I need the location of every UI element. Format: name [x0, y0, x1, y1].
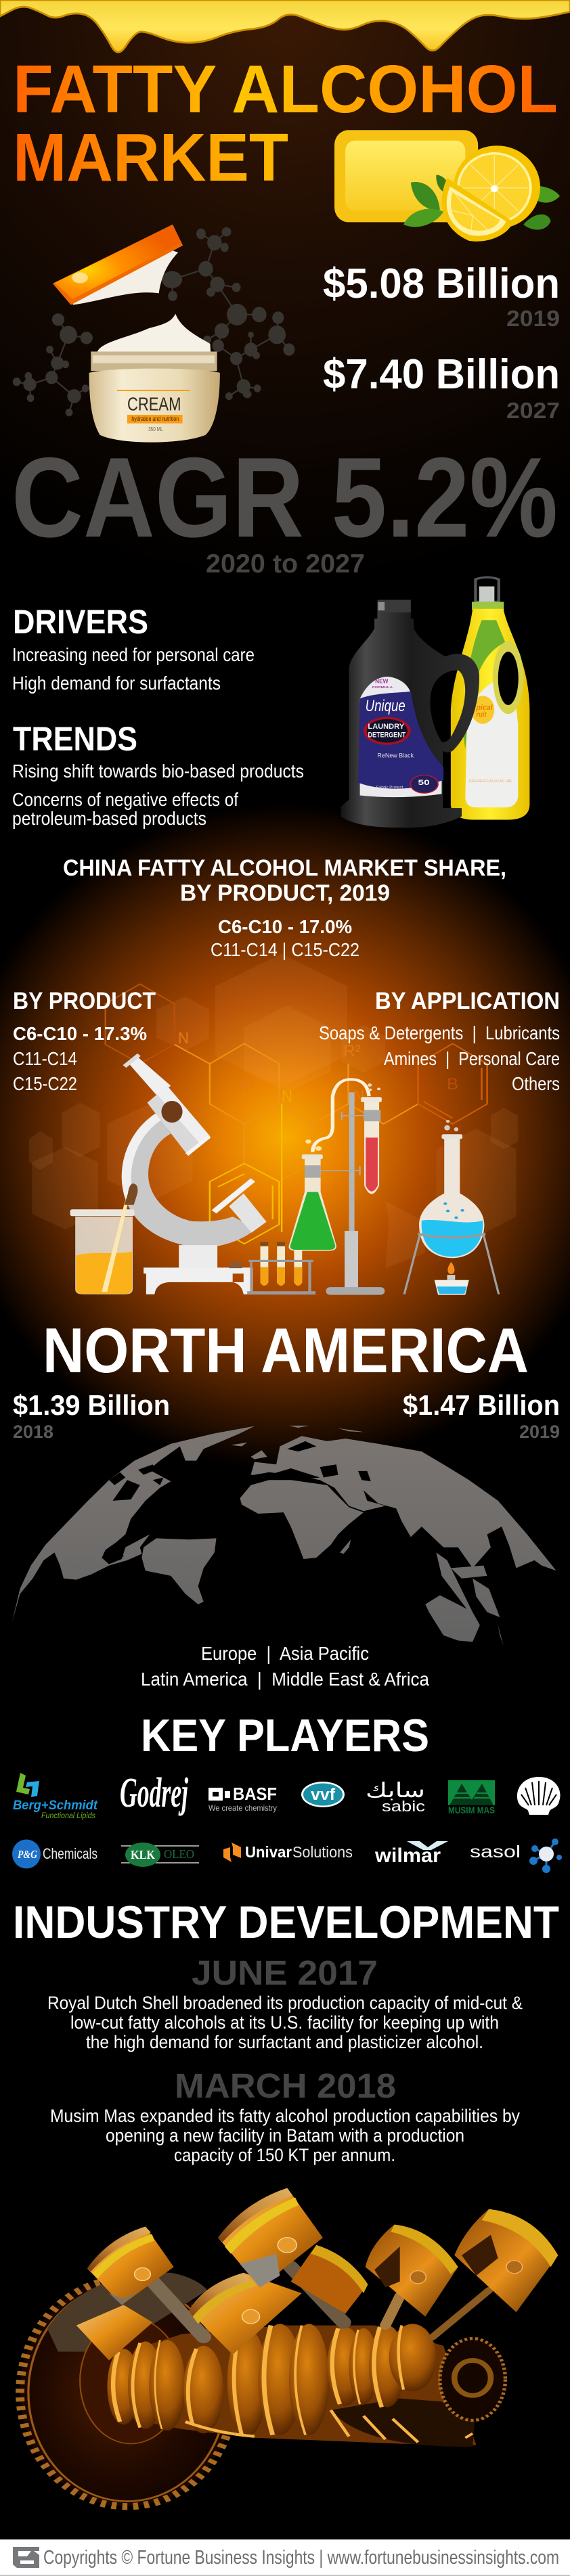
- icon: detergent bottles: ReNew Black: [377, 752, 414, 759]
- logo: Berg+Schmidt: Berg+Schmidt: [13, 1799, 98, 1813]
- icon: detergent bottles: Fabric Protect: [376, 786, 403, 790]
- chemistry labels: N: [178, 1029, 189, 1047]
- market value 2027: [323, 351, 560, 423]
- chemistry labels: R¹: [239, 1077, 254, 1095]
- market value 2019: [323, 261, 560, 331]
- chemistry labels: R²: [343, 1042, 361, 1060]
- logo: Univar Solutions: Univar: [245, 1843, 292, 1861]
- other regions: Europe | Asia Pacific: [201, 1643, 369, 1664]
- icon: detergent bottles: LAUNDRY: [368, 723, 405, 731]
- by product list: BY PRODUCT: [13, 988, 156, 1014]
- North America 2018 value: 2018: [13, 1422, 53, 1442]
- top brown background glow: [0, 0, 570, 595]
- development: June 2017: low-cut fatty alcohols at its U.S. facility for keeping up with: [70, 2012, 499, 2033]
- footer logo: [13, 2547, 39, 2568]
- by product list: [13, 988, 156, 1094]
- logo: P&G Chemicals: P&G: [17, 1848, 38, 1861]
- icon: world map globe: [12, 1426, 556, 1646]
- trends: Concerns of negative effects of: [12, 789, 238, 810]
- icon: cream jar: CREAM: [127, 394, 181, 415]
- logo: Sasol: [470, 1838, 562, 1873]
- by product list: C6-C10 - 17.3%: [13, 1023, 147, 1044]
- footer bar: [0, 2539, 570, 2576]
- logo: BASF: [209, 1784, 277, 1813]
- trends: [12, 720, 304, 829]
- icon: detergent bottles: 50: [418, 779, 430, 787]
- pistons: [76, 2188, 558, 2360]
- chart heading: China share: C6-C10 - 17.0%: [218, 916, 352, 937]
- logo: Musim Mas: [448, 1780, 495, 1815]
- by product list: C15-C22: [13, 1073, 77, 1094]
- drivers: [12, 603, 255, 694]
- development: June 2017: JUNE 2017: [192, 1953, 378, 1992]
- title: MARKET: [13, 120, 288, 196]
- development: March 2018: MARCH 2018: [175, 2066, 396, 2105]
- title: [13, 51, 558, 196]
- chemistry labels: N: [353, 1087, 364, 1106]
- icon: cream jar: [53, 225, 220, 443]
- other regions: [141, 1643, 429, 1690]
- small gear: [440, 2338, 505, 2420]
- icon: cream jar: hydration and nutrition: [131, 415, 179, 422]
- logo: P&G Chemicals: Chemicals: [43, 1845, 97, 1862]
- development: March 2018: Musim Mas expanded its fatty alcohol production capabilities by: [50, 2106, 520, 2126]
- logo: Musim Mas: MUSIM MAS: [448, 1805, 495, 1815]
- title: FATTY ALCOHOL: [13, 51, 558, 127]
- icon: soap and lemon: [334, 130, 560, 242]
- development: June 2017: Royal Dutch Shell broadened its production capacity of mid-cut &: [47, 1993, 523, 2013]
- icon: detergent bottles: FORMULA: [372, 686, 393, 690]
- chemistry labels: B: [447, 1075, 458, 1093]
- logo: P&G Chemicals: [12, 1839, 97, 1869]
- red test tube: [361, 1083, 382, 1194]
- CAGR: 2020 to 2027: [206, 549, 365, 579]
- trends: petroleum-based products: [12, 808, 206, 829]
- chart heading: China share: BY PRODUCT, 2019: [180, 880, 390, 906]
- by product list: C11-C14: [13, 1048, 77, 1069]
- logo: Univar Solutions: Solutions: [292, 1843, 353, 1861]
- central orange lab glow: [0, 795, 570, 1478]
- icon: golden engine: [20, 2188, 558, 2506]
- crankshaft: [107, 2324, 476, 2447]
- icon: detergent bottles: [341, 577, 529, 828]
- logo: Sasol: sasol: [470, 1843, 521, 1861]
- icon: detergent bottles: ruit: [476, 710, 487, 719]
- logo: KLK Oleo: OLEO: [164, 1847, 194, 1861]
- icon: detergent bottles: pical: [476, 704, 493, 712]
- icon: detergent bottles: NEW: [375, 679, 389, 684]
- logo: Berg+Schmidt: [13, 1773, 98, 1820]
- development: March 2018: [50, 2066, 520, 2165]
- chart heading: China share: [63, 855, 506, 960]
- trends: TRENDS: [13, 720, 137, 758]
- microscope: [122, 1054, 267, 1294]
- drivers: Increasing need for personal care: [12, 644, 255, 665]
- drivers: High demand for surfactants: [12, 673, 221, 694]
- North America 2018 value: [13, 1389, 170, 1442]
- icon: lab equipment: [70, 1054, 499, 1295]
- big gear: [20, 2272, 234, 2506]
- North America 2019 value: $1.47 Billion: [403, 1389, 560, 1421]
- North America 2019 value: [403, 1389, 560, 1442]
- trends: Rising shift towards bio-based products: [12, 761, 304, 782]
- icon: cream jar: 350 ML: [148, 426, 163, 432]
- development: June 2017: the high demand for surfactant and plasticizer alcohol.: [86, 2032, 483, 2052]
- drivers: DRIVERS: [13, 603, 148, 641]
- logo: vvf: [301, 1782, 345, 1807]
- erlenmeyer flask: [288, 1079, 369, 1251]
- logo: Wilmar: wilmar: [374, 1845, 441, 1867]
- gold oil drip: [0, 0, 570, 52]
- chemistry labels: [178, 1029, 458, 1106]
- logo: sabic: sabic: [382, 1798, 425, 1815]
- by application list: Others: [512, 1073, 560, 1094]
- by application list: BY APPLICATION: [375, 988, 560, 1014]
- chart heading: China share: CHINA FATTY ALCOHOL MARKET SHARE,: [63, 855, 506, 881]
- development: March 2018: opening a new facility in Batam with a production: [106, 2125, 464, 2146]
- logo: sabic: سابك: [366, 1779, 425, 1803]
- logo: Godrej: Godrej: [120, 1770, 188, 1816]
- logo: BASF: BASF: [233, 1784, 277, 1804]
- connecting rods: [153, 2267, 489, 2337]
- chemistry labels: N: [282, 1087, 292, 1106]
- chart heading: China share: C11-C14 | C15-C22: [211, 939, 359, 960]
- key players heading: KEY PLAYERS: [141, 1710, 429, 1761]
- icon: detergent bottles: Unique: [366, 696, 405, 715]
- beaker: [70, 1183, 137, 1294]
- development: June 2017: [47, 1953, 523, 2052]
- North America 2018 value: $1.39 Billion: [13, 1389, 170, 1421]
- icon: detergent bottles: FRESHNESS FOR A LONG TIME: [469, 779, 512, 784]
- market value 2019: 2019: [506, 306, 560, 331]
- logo: vvf: vvf: [311, 1786, 336, 1804]
- North America 2019 value: 2019: [519, 1422, 560, 1442]
- logo: KLK Oleo: KLK: [131, 1848, 155, 1861]
- test tube rack: [247, 1242, 315, 1294]
- hexagon chemistry background: [29, 954, 518, 1269]
- market value 2027: $7.40 Billion: [323, 351, 560, 398]
- logo: sabic: [366, 1779, 425, 1815]
- market value 2027: 2027: [506, 398, 560, 423]
- round flask and burner: [404, 1120, 499, 1295]
- market value 2019: $5.08 Billion: [323, 261, 560, 307]
- development: March 2018: capacity of 150 KT per annum.: [174, 2145, 395, 2165]
- logo: KLK Oleo: [121, 1843, 199, 1867]
- region heading: North America: NORTH AMERICA: [43, 1315, 529, 1386]
- logo: Shell: [517, 1777, 561, 1815]
- logo: Berg+Schmidt: Functional Lipids: [41, 1811, 95, 1820]
- by application list: [319, 988, 560, 1094]
- icon: molecule background: [13, 227, 295, 416]
- logo: Univar Solutions: [223, 1843, 353, 1862]
- retort stand: [321, 1092, 385, 1295]
- other regions: Latin America | Middle East & Africa: [141, 1669, 429, 1690]
- logo: BASF: We create chemistry: [209, 1803, 277, 1813]
- icon: detergent bottles: DETERGENT: [368, 731, 406, 739]
